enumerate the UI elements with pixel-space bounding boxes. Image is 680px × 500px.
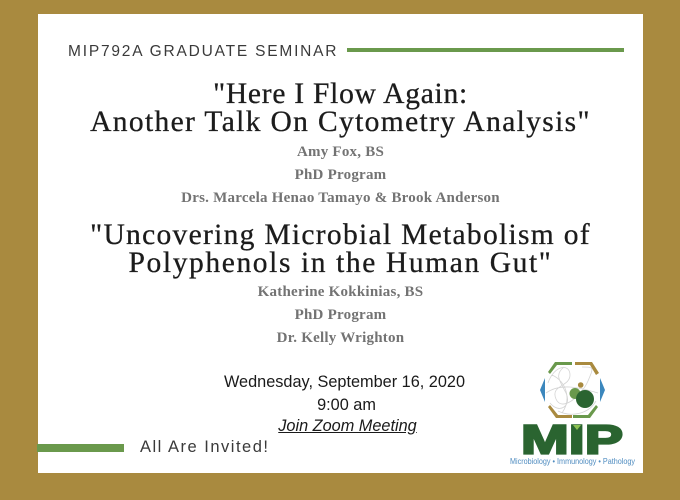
title: first talk: Another Talk On Cytometry Analysis" [90, 106, 591, 138]
zoom link: Join Zoom Meeting [278, 417, 417, 435]
title: second talk: "Uncovering Microbial Metabolism of [90, 219, 591, 251]
speaker block: first talk [181, 144, 500, 206]
speaker name: Amy Fox, BS [297, 144, 384, 160]
title: second talk: Polyphenols in the Human Gut" [129, 247, 552, 279]
event time: 9:00 am [317, 396, 376, 414]
hexagon bottom right segment [573, 405, 598, 418]
speaker program: PhD Program [295, 167, 386, 183]
top green rule [347, 48, 624, 52]
speaker program: PhD Program [295, 307, 386, 323]
hexagon left point [540, 378, 545, 402]
hexagon bottom left segment [548, 405, 572, 418]
dark green circle [576, 390, 594, 408]
speaker name: Katherine Kokkinias, BS [258, 284, 423, 300]
title: first talk [90, 78, 591, 138]
icon: hexagon emblem [540, 362, 605, 418]
speaker block: second talk [258, 284, 423, 346]
hexagon right point [600, 378, 605, 402]
speaker mentors: Drs. Marcela Henao Tamayo & Brook Anderson [181, 190, 500, 206]
title: second talk [90, 219, 591, 279]
title: first talk: "Here I Flow Again: [213, 78, 468, 110]
light green circle [570, 388, 580, 399]
event date: Wednesday, September 16, 2020 [224, 373, 465, 391]
heading: seminar name: MIP792A GRADUATE SEMINAR [68, 43, 338, 60]
small gold circle [578, 382, 584, 388]
invitation text: All Are Invited! [140, 438, 269, 456]
logo letters: MIP [521, 416, 623, 462]
speaker mentor: Dr. Kelly Wrighton [277, 330, 404, 346]
light green notch on the I [573, 425, 581, 430]
hexagon top left segment [548, 362, 572, 374]
hexagon top right segment [575, 362, 599, 375]
logo: MIP [510, 362, 635, 466]
bottom green rule [37, 444, 124, 452]
